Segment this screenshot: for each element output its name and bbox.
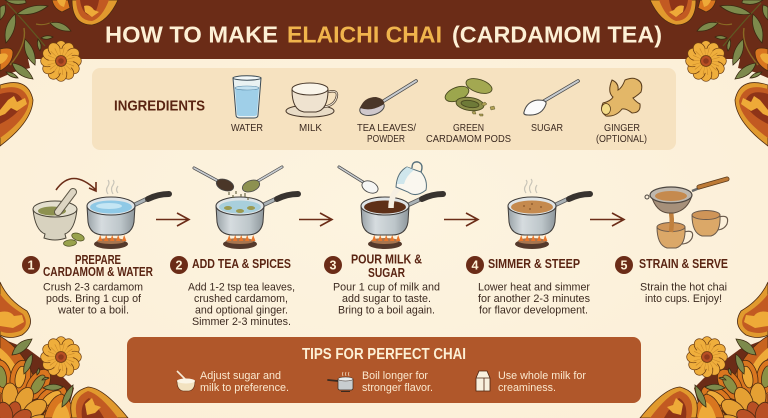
- panel: ingredients: [92, 68, 676, 150]
- steam: [106, 180, 118, 194]
- step 2 text: crushed cardamom,: [194, 293, 288, 305]
- tip 3 text: creaminess.: [498, 382, 556, 394]
- flower: top left: [41, 41, 81, 81]
- corner ornament: bottom left: [0, 282, 128, 418]
- step 2 text: [188, 282, 295, 328]
- step 4 text: Lower heat and simmer: [478, 282, 590, 294]
- corner ornament: top right: [650, 0, 768, 146]
- step 2 text: and optional ginger.: [195, 304, 288, 316]
- step 5 text: Strain the hot chai: [640, 282, 727, 294]
- corner ornament: bottom right: [640, 282, 768, 418]
- step 5 number: 5: [621, 258, 628, 272]
- step 3 text: [333, 282, 440, 316]
- step 3 text: add sugar to taste.: [342, 293, 431, 305]
- step 4 number: 4: [472, 258, 479, 272]
- tea leaves label: [357, 123, 416, 145]
- step 1 text: [43, 282, 143, 316]
- tea spoon: [194, 168, 218, 181]
- cardamom label: [426, 123, 511, 145]
- ingredients heading: INGREDIENTS: [114, 98, 205, 115]
- saucepan: [216, 194, 298, 249]
- icon: ginger root: [602, 78, 642, 116]
- sugar label: SUGAR: [531, 123, 563, 134]
- corner ornament: top left: [0, 0, 118, 146]
- step 1 number: [22, 256, 40, 274]
- icon: bowl and spoon: [177, 371, 195, 391]
- icon: sugar spoon: [524, 81, 578, 115]
- header band: [0, 0, 768, 59]
- flower: bottom left: [41, 337, 81, 377]
- step 2 title: ADD TEA & SPICES: [192, 257, 291, 271]
- milk stream: [391, 186, 402, 208]
- icon: milk cup: [286, 83, 337, 117]
- title: ELAICHI CHAI: [287, 22, 442, 48]
- step 3 title: POUR MILK &: [351, 252, 422, 266]
- tip 1 text: Adjust sugar and: [200, 370, 281, 382]
- arrow: step 3 to 4: [444, 213, 478, 226]
- step 5 number: [615, 256, 633, 274]
- title: (CARDAMOM TEA): [452, 22, 662, 48]
- tip 3 text: [498, 370, 586, 394]
- strainer handle: [692, 187, 702, 191]
- cardamom label: GREEN: [453, 123, 484, 134]
- cardamom label: CARDAMOM PODS: [426, 134, 511, 145]
- step 1 text: pods. Bring 1 cup of: [46, 293, 142, 305]
- tea leaves label: POWDER: [367, 134, 405, 145]
- title: [105, 22, 662, 48]
- step 4 text: [478, 282, 590, 316]
- pestle: [58, 192, 73, 212]
- step 2 illustration: [194, 167, 298, 249]
- step 1 title: CARDAMOM & WATER: [43, 265, 153, 279]
- tea leaves label: TEA LEAVES/: [357, 123, 416, 134]
- step 1 title: PREPARE: [75, 253, 121, 267]
- tip 2 text: stronger flavor.: [362, 382, 433, 394]
- step 3 illustration: [339, 162, 443, 249]
- icon: water glass: [233, 76, 261, 118]
- strainer mesh: [651, 195, 692, 213]
- milk jug: [396, 167, 426, 195]
- tip 3 text: Use whole milk for: [498, 370, 586, 382]
- icon: milk carton: [476, 371, 490, 391]
- step 4 text: for flavor development.: [479, 304, 588, 316]
- ginger label: (OPTIONAL): [596, 134, 647, 145]
- step 1 illustration: [33, 178, 169, 249]
- title: HOW TO MAKE: [105, 22, 278, 48]
- icon: green cardamom pods: [443, 76, 495, 116]
- flower: bottom right: [687, 337, 727, 377]
- saucepan: [87, 194, 169, 249]
- step 2 number: [170, 256, 188, 274]
- step 3 text: Pour 1 cup of milk and: [333, 282, 440, 294]
- step 4 number: [466, 256, 484, 274]
- tip 2 text: Boil longer for: [362, 370, 428, 382]
- step 3 number: 3: [330, 258, 337, 272]
- step 4 title: SIMMER & STEEP: [488, 257, 580, 271]
- back cup: [716, 216, 728, 230]
- arrow: step 2 to 3: [299, 213, 332, 226]
- step 1 text: water to a boil.: [57, 304, 129, 316]
- milk label: MILK: [299, 123, 322, 134]
- step 4 text: for another 2-3 minutes: [478, 293, 590, 305]
- tea stream: [670, 208, 672, 232]
- mortar: [33, 209, 77, 240]
- steam: [524, 179, 537, 193]
- water label: WATER: [231, 123, 263, 134]
- step 5 title: STRAIN & SERVE: [639, 257, 728, 271]
- tip 1 text: milk to preference.: [200, 382, 289, 394]
- step 5 illustration: [645, 179, 728, 248]
- icon: small pot: [328, 372, 353, 392]
- step 4 illustration: [508, 179, 590, 249]
- step 1 title: [43, 253, 153, 279]
- step 1 number: 1: [28, 258, 35, 272]
- sugar spoon: [339, 167, 363, 182]
- step 3 title: SUGAR: [368, 266, 405, 280]
- step 5 text: into cups. Enjoy!: [645, 293, 722, 305]
- saucepan: [361, 194, 443, 249]
- tips heading: TIPS FOR PERFECT CHAI: [302, 346, 466, 363]
- step 2 text: Simmer 2-3 minutes.: [192, 316, 291, 328]
- step 5 text: [640, 282, 727, 305]
- ginger label: [596, 123, 647, 145]
- ginger label: GINGER: [604, 123, 640, 134]
- icon: tea spoon: [358, 81, 416, 118]
- flower: top right: [686, 41, 726, 81]
- step 3 text: Bring to a boil again.: [338, 304, 435, 316]
- tip 2 text: [362, 370, 433, 394]
- tip 1 text: [200, 370, 289, 394]
- panel: tips: [127, 337, 641, 403]
- arrow: step 1 to 2: [156, 213, 189, 226]
- curved arrow: [56, 178, 96, 191]
- falling spices: [229, 191, 248, 200]
- cardamom pods: [71, 231, 85, 243]
- step 3 number: [324, 256, 342, 274]
- step 2 number: 2: [176, 258, 183, 272]
- step 3 title: [351, 252, 422, 280]
- front cup: [681, 231, 693, 244]
- spice spoon: [258, 167, 282, 181]
- step 2 text: Add 1-2 tsp tea leaves,: [188, 282, 295, 294]
- step 1 text: Crush 2-3 cardamom: [43, 282, 143, 294]
- saucepan: [508, 194, 590, 249]
- arrow: step 4 to 5: [590, 213, 624, 226]
